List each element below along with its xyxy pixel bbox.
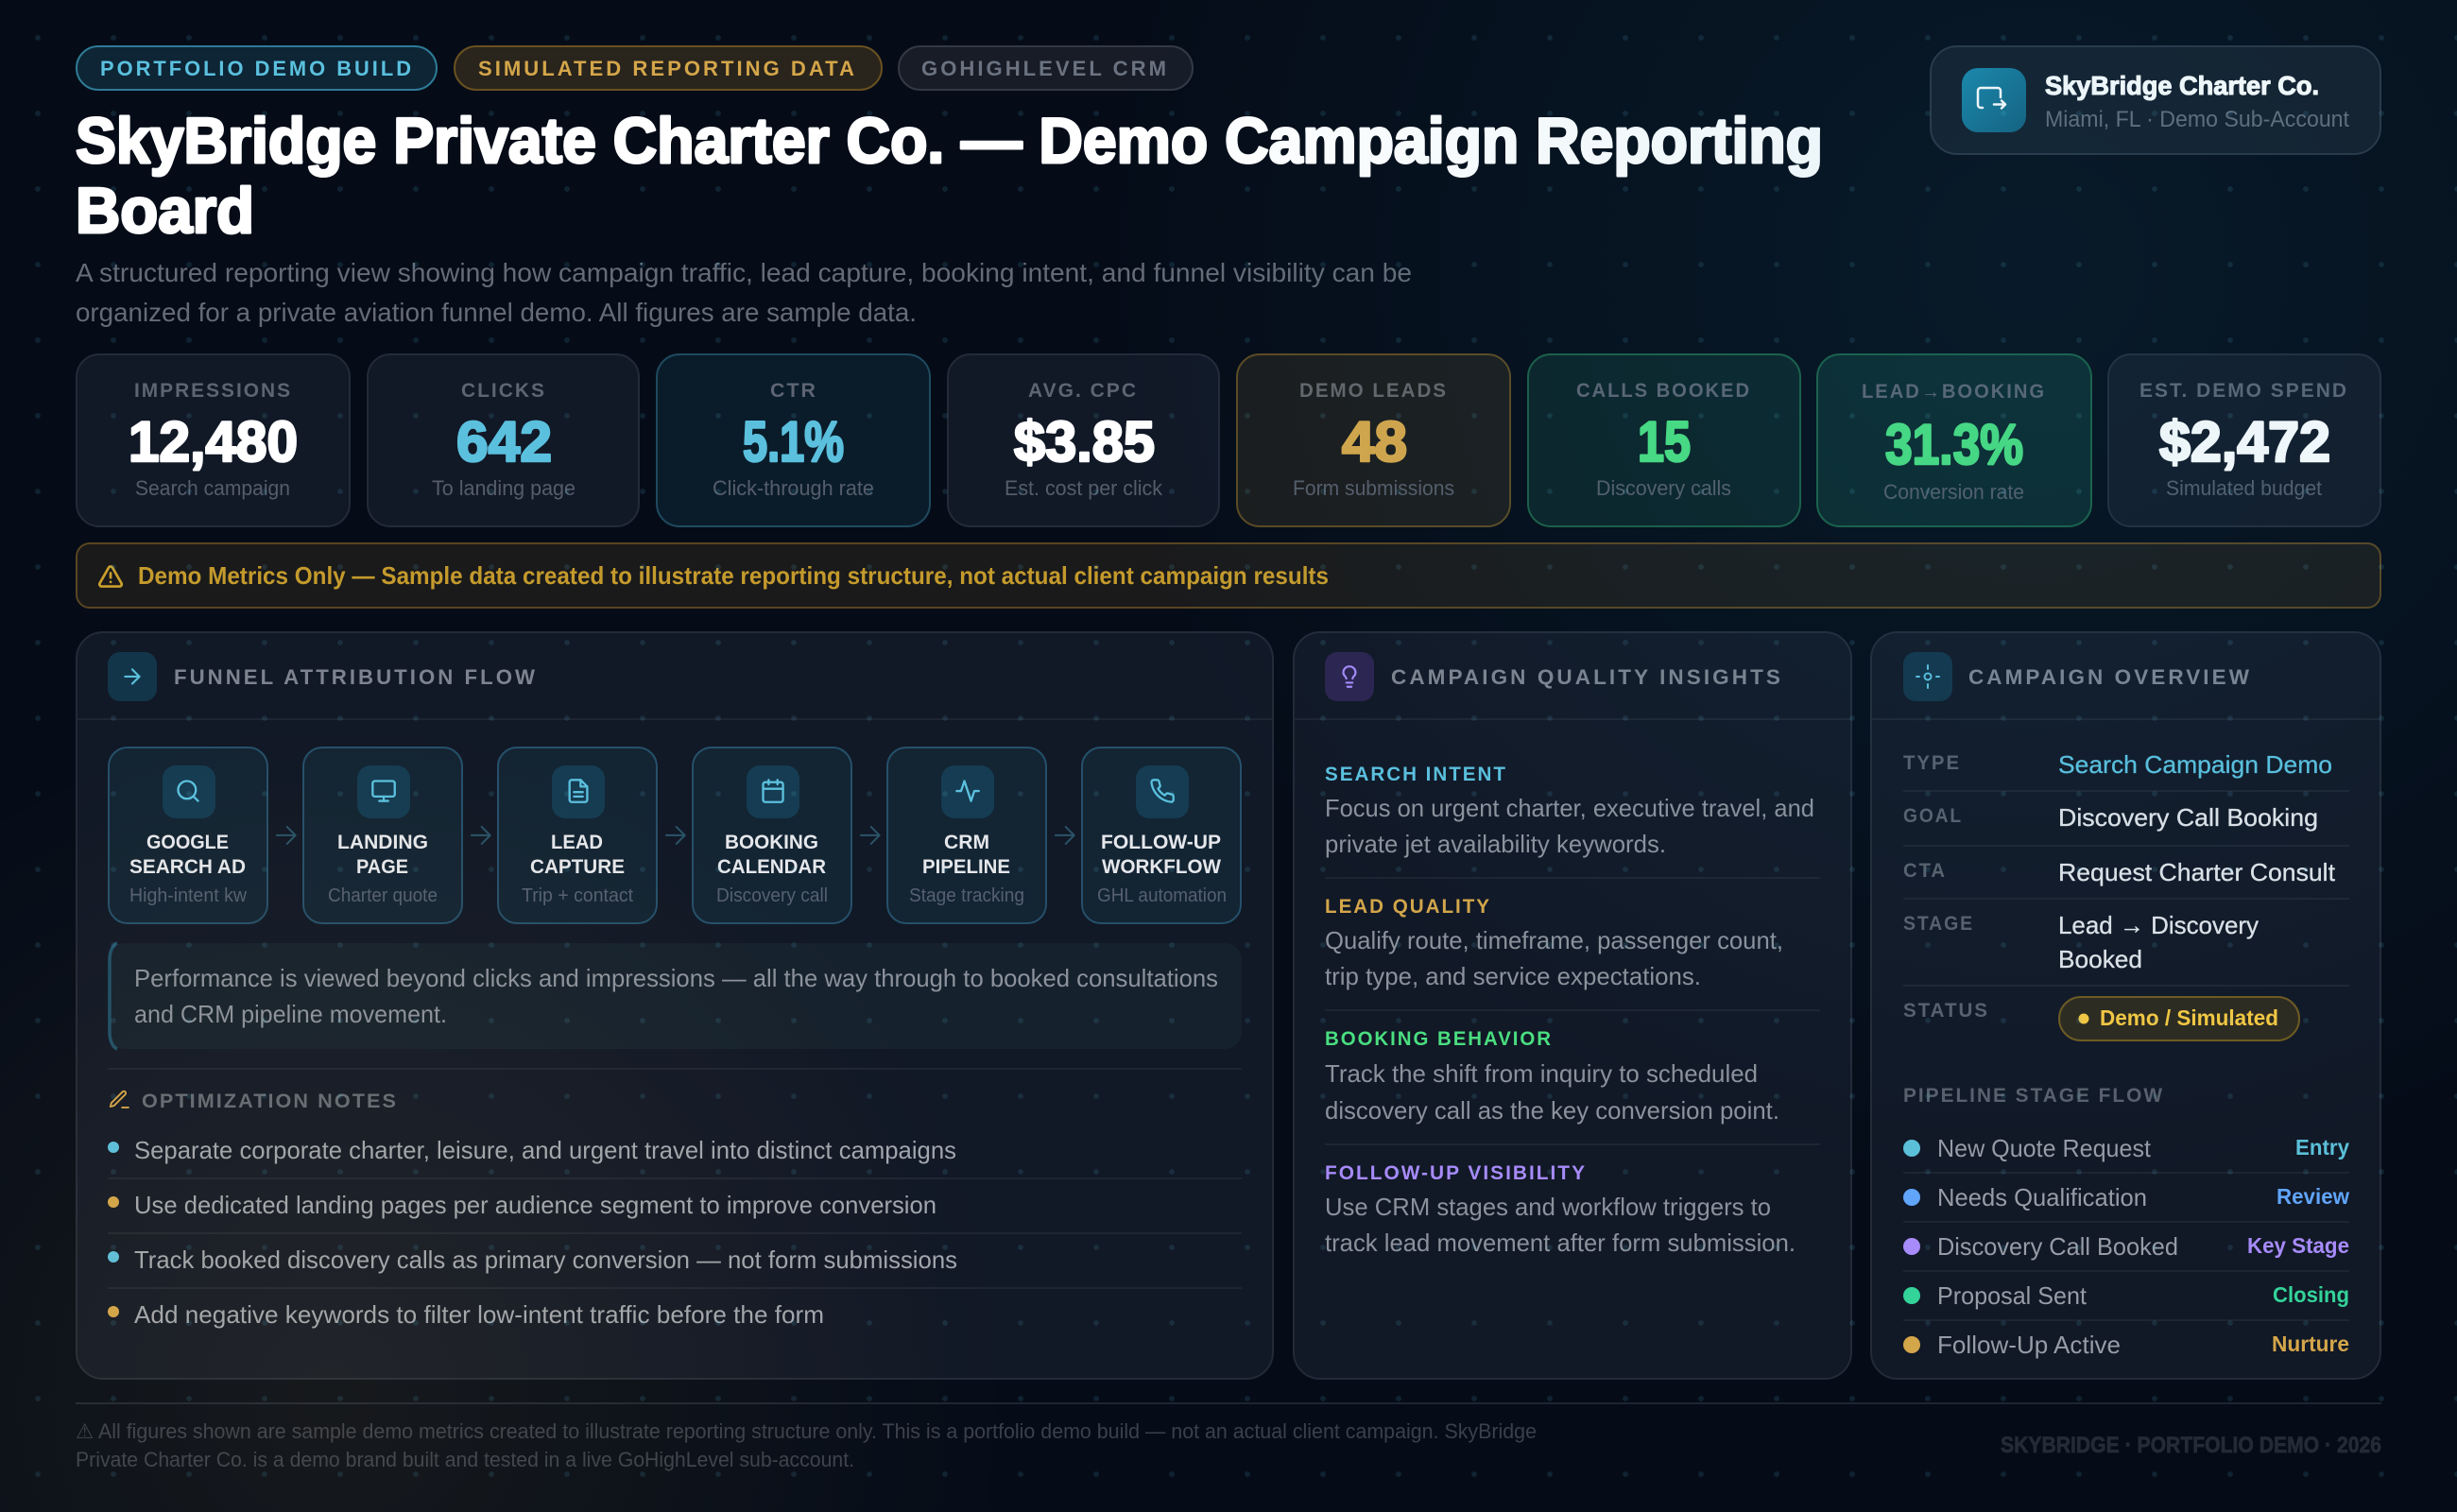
panel: campaign quality insights xyxy=(1294,632,1851,1379)
field: stage: STAGE xyxy=(1903,913,1974,935)
icon: warning triangle xyxy=(99,566,122,587)
subtitle: organized for a private aviation funnel demo. All figures are sample data. xyxy=(76,298,917,327)
tag: gohighlevel crm: GOHIGHLEVEL CRM xyxy=(921,57,1169,80)
insight: booking behavior: discovery call as the key conversion point. xyxy=(1325,1096,1779,1125)
footer disclaimer: Private Charter Co. is a demo brand built and tested in a live GoHighLevel sub-account. xyxy=(76,1448,854,1471)
arrow xyxy=(861,827,880,844)
kpi: demo leads: Form submissions xyxy=(1293,476,1454,500)
flow step: booking calendar: CALENDAR xyxy=(717,856,826,878)
kpi: lead to booking xyxy=(1817,354,2091,526)
footer disclaimer xyxy=(76,1419,1537,1471)
brand card xyxy=(1931,46,2380,154)
field: goal: Discovery Call Booking xyxy=(2058,803,2318,832)
insight: booking behavior: BOOKING BEHAVIOR xyxy=(1325,1028,1553,1050)
kpi: avg cpc: Est. cost per click xyxy=(1005,476,1163,500)
field: stage xyxy=(1903,911,2259,973)
kpi: est demo spend: EST. DEMO SPEND xyxy=(2139,380,2348,402)
kpi: ctr: 5.1% xyxy=(743,410,844,473)
flow step: landing page xyxy=(303,747,462,923)
title: SkyBridge Private Charter Co. — Demo Campaign Reporting xyxy=(76,105,1823,177)
insight: lead quality: Qualify route, timeframe, passenger count, xyxy=(1325,926,1783,954)
tag: simulated reporting data: SIMULATED REPORTING DATA xyxy=(478,57,857,80)
field: cta: Request Charter Consult xyxy=(2058,858,2336,886)
panel: campaign overview xyxy=(1871,632,2380,1379)
flow step: lead capture xyxy=(498,747,657,923)
brand card: Miami, FL · Demo Sub-Account xyxy=(2045,107,2349,132)
insight: search intent xyxy=(1325,764,1814,858)
kpi: demo leads: 48 xyxy=(1342,410,1407,473)
kpi: impressions: IMPRESSIONS xyxy=(134,380,292,402)
field: cta: CTA xyxy=(1903,860,1947,882)
list: optimization notes: Use dedicated landing pages per audience segment to improve conversion xyxy=(134,1191,936,1219)
field: type: Search Campaign Demo xyxy=(2058,750,2332,779)
flow step: booking calendar xyxy=(693,747,851,923)
list: optimization notes: Track booked discovery calls as primary conversion — not form submissions xyxy=(134,1246,957,1274)
kpi: avg cpc: AVG. CPC xyxy=(1028,380,1138,402)
callout: performance note: and CRM pipeline movement. xyxy=(134,1000,447,1028)
flow step: google search ad: SEARCH AD xyxy=(129,856,246,878)
subtitle xyxy=(76,258,1412,327)
brand card: SkyBridge Charter Co. xyxy=(2045,71,2319,100)
icon: lightbulb xyxy=(1325,652,1374,701)
insight: follow-up visibility: track lead movement after form submission. xyxy=(1325,1228,1796,1257)
flow step: follow-up workflow: FOLLOW-UP xyxy=(1101,832,1221,853)
insight: search intent: SEARCH INTENT xyxy=(1325,764,1507,785)
tag: gohighlevel crm xyxy=(899,46,1193,90)
kpi: clicks: 642 xyxy=(456,410,552,473)
pipeline: proposal sent: Closing xyxy=(2273,1282,2349,1307)
insight: booking behavior: Track the shift from inquiry to scheduled xyxy=(1325,1059,1758,1088)
panel: funnel attribution flow xyxy=(77,632,1273,1379)
field: status: STATUS xyxy=(1903,1000,1989,1022)
flow step: lead capture: Trip + contact xyxy=(522,885,633,906)
insight: follow-up visibility xyxy=(1325,1162,1796,1257)
callout: performance note xyxy=(108,943,1242,1049)
kpi: clicks: CLICKS xyxy=(461,380,546,402)
kpi: ctr: CTR xyxy=(770,380,817,402)
flow step: crm pipeline xyxy=(887,747,1046,923)
footer disclaimer: ⚠ All figures shown are sample demo metrics created to illustrate reporting structure only. This is a portfolio demo build — not an actual client campaign. SkyBridge xyxy=(76,1419,1537,1443)
flow step: landing page: LANDING xyxy=(337,832,428,853)
arrow xyxy=(666,827,685,844)
pipeline: follow-up active: Follow-Up Active xyxy=(1937,1331,2121,1359)
kpi: calls booked xyxy=(1528,354,1800,526)
kpi: lead to booking: Conversion rate xyxy=(1883,480,2024,504)
flow step: lead capture: LEAD xyxy=(551,832,603,853)
pipeline: proposal sent: Proposal Sent xyxy=(1937,1281,2088,1310)
pipeline: follow-up active: Nurture xyxy=(2272,1332,2349,1356)
flow step: crm pipeline: PIPELINE xyxy=(922,856,1010,878)
kpi: impressions xyxy=(77,354,350,526)
subtitle: A structured reporting view showing how campaign traffic, lead capture, booking intent, and funnel visibility can be xyxy=(76,258,1412,287)
field: status xyxy=(1903,997,2299,1040)
arrow xyxy=(277,827,296,844)
pipeline: proposal sent xyxy=(1903,1281,2349,1310)
field: goal xyxy=(1903,803,2318,832)
icon: brand logo xyxy=(1962,68,2026,132)
kpi: clicks: To landing page xyxy=(432,476,576,500)
flow step: follow-up workflow: GHL automation xyxy=(1097,885,1227,906)
pipeline: new quote request xyxy=(1903,1134,2349,1162)
pipeline: needs qualification: Review xyxy=(2277,1184,2349,1209)
pipeline: discovery call booked xyxy=(1903,1232,2349,1261)
field: type: TYPE xyxy=(1903,752,1961,774)
flow step: crm pipeline: CRM xyxy=(944,832,989,853)
list: optimization notes: Separate corporate charter, leisure, and urgent travel into distinct campaigns xyxy=(134,1136,956,1164)
kpi: demo leads xyxy=(1237,354,1510,526)
title: Board xyxy=(76,175,254,247)
heading: campaign quality insights: CAMPAIGN QUALITY INSIGHTS xyxy=(1391,665,1783,689)
pipeline: discovery call booked: Key Stage xyxy=(2247,1233,2349,1258)
kpi: calls booked: CALLS BOOKED xyxy=(1576,380,1751,402)
pipeline: follow-up active xyxy=(1903,1331,2349,1359)
icon: target xyxy=(1903,652,1952,701)
kpi: avg cpc xyxy=(948,354,1219,526)
heading: campaign overview: CAMPAIGN OVERVIEW xyxy=(1968,665,2252,689)
field: cta xyxy=(1903,858,2336,886)
flow step: landing page: Charter quote xyxy=(328,885,438,906)
heading: funnel attribution flow: FUNNEL ATTRIBUTION FLOW xyxy=(174,665,538,689)
heading: pipeline stage flow: PIPELINE STAGE FLOW xyxy=(1903,1085,2164,1107)
kpi: impressions: Search campaign xyxy=(135,476,290,500)
flow step: booking calendar: BOOKING xyxy=(725,832,818,853)
insight: lead quality xyxy=(1325,896,1783,990)
insight: follow-up visibility: FOLLOW-UP VISIBILITY xyxy=(1325,1162,1587,1184)
pipeline: new quote request: New Quote Request xyxy=(1937,1134,2152,1162)
warning banner xyxy=(77,543,2380,608)
kpi: demo leads: DEMO LEADS xyxy=(1299,380,1448,402)
pipeline: discovery call booked: Discovery Call Booked xyxy=(1937,1232,2178,1261)
kpi: calls booked: Discovery calls xyxy=(1596,476,1731,500)
kpi: est demo spend: Simulated budget xyxy=(2166,476,2322,500)
list: optimization notes xyxy=(108,1136,1242,1329)
field: type xyxy=(1903,750,2332,779)
field: goal: GOAL xyxy=(1903,805,1963,827)
kpi: clicks xyxy=(368,354,639,526)
list: optimization notes: Add negative keywords to filter low-intent traffic before the form xyxy=(134,1300,824,1329)
kpi: est demo spend: $2,472 xyxy=(2159,410,2330,473)
flow step: google search ad xyxy=(109,747,267,923)
title xyxy=(76,105,1823,247)
pipeline: new quote request: Entry xyxy=(2295,1135,2349,1160)
flow step: crm pipeline: Stage tracking xyxy=(909,885,1024,906)
insight: lead quality: LEAD QUALITY xyxy=(1325,896,1491,918)
footer brand mark: SKYBRIDGE · PORTFOLIO DEMO · 2026 xyxy=(2001,1433,2381,1458)
flow step: google search ad: High-intent kw xyxy=(129,885,248,906)
pipeline: needs qualification xyxy=(1903,1183,2349,1211)
arrow xyxy=(472,827,490,844)
callout: performance note: Performance is viewed beyond clicks and impressions — all the way through to booked consultations xyxy=(134,964,1218,992)
heading: optimization notes: OPTIMIZATION NOTES xyxy=(142,1091,398,1112)
warning banner: Demo Metrics Only — Sample data created to illustrate reporting structure, not actual client campaign results xyxy=(138,561,1329,590)
kpi: ctr: Click-through rate xyxy=(713,476,874,500)
kpi: lead to booking: LEAD→BOOKING xyxy=(1862,381,2046,403)
arrow xyxy=(1056,827,1074,844)
kpi: est demo spend xyxy=(2108,354,2380,526)
flow step: lead capture: CAPTURE xyxy=(530,856,625,878)
field: status: Demo / Simulated xyxy=(2100,1005,2278,1030)
insight: follow-up visibility: Use CRM stages and workflow triggers to xyxy=(1325,1193,1771,1221)
pipeline: needs qualification: Needs Qualification xyxy=(1937,1183,2147,1211)
field: stage: Lead → Discovery xyxy=(2058,911,2259,939)
field: stage: Booked xyxy=(2058,945,2142,973)
tag: portfolio demo build: PORTFOLIO DEMO BUILD xyxy=(100,57,414,80)
flow step: follow-up workflow: WORKFLOW xyxy=(1102,856,1221,878)
flow step: landing page: PAGE xyxy=(356,856,408,878)
kpi: ctr xyxy=(657,354,930,526)
kpi: calls booked: 15 xyxy=(1638,410,1691,473)
kpi: impressions: 12,480 xyxy=(129,410,298,473)
insight: booking behavior xyxy=(1325,1028,1779,1125)
tag: simulated reporting data xyxy=(455,46,882,90)
icon: arrow right xyxy=(108,652,157,701)
tag: portfolio demo build xyxy=(77,46,437,90)
flow step: follow-up workflow xyxy=(1082,747,1241,923)
flow step: booking calendar: Discovery call xyxy=(716,885,828,906)
kpi: avg cpc: $3.85 xyxy=(1014,410,1155,473)
kpi: lead to booking: 31.3% xyxy=(1885,413,2023,476)
insight: lead quality: trip type, and service expectations. xyxy=(1325,962,1701,990)
insight: search intent: private jet availability keywords. xyxy=(1325,830,1666,858)
insight: search intent: Focus on urgent charter, executive travel, and xyxy=(1325,794,1814,822)
flow step: google search ad: GOOGLE xyxy=(146,832,229,853)
